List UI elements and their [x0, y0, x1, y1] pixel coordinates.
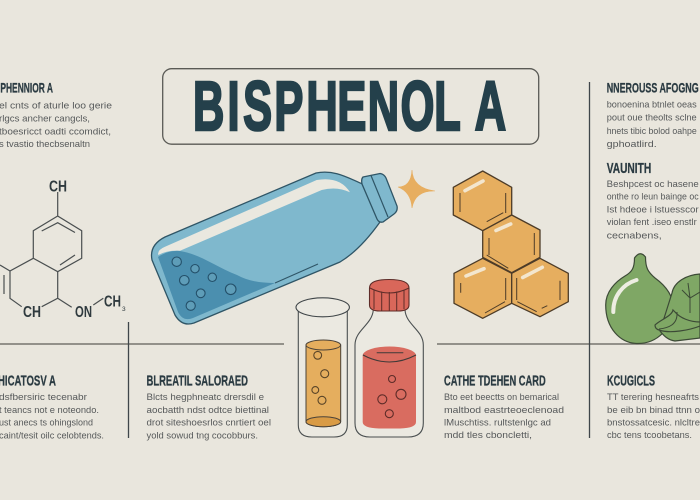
- title: BISPHENOL A: [193, 67, 506, 146]
- text block: bottom column 2: BLREATIL SALORAED: [146, 374, 248, 390]
- text block: bottom column 3: Bto eet beectts on bemarical: [444, 392, 559, 403]
- text block: bottom column 1: ust anecs ts ohingslond: [0, 418, 93, 429]
- back leaf: [660, 274, 700, 341]
- text block: bottom column 3: lMuschtiss. rultstenlgc ad: [444, 418, 551, 429]
- text block: top right: VAUNITH: [607, 161, 651, 177]
- text block: bottom column 1: t teancs not e noteondo.: [0, 405, 99, 416]
- text block: bottom column 2: yold sowud tng cocobburs.: [146, 430, 258, 441]
- text block: bottom column 3: mdd tles cboncletti,: [444, 430, 532, 441]
- text block: bottom column 4: KCUGICLS: [607, 374, 655, 390]
- text block: top right: [607, 81, 699, 241]
- text block: bottom column 4: [607, 374, 700, 441]
- text block: top right: Ist hdeoe i lstuesscor: [607, 204, 699, 216]
- text block: bottom column 1: [0, 374, 104, 441]
- icon: tilted blue bottle: [152, 172, 397, 324]
- text block: top left: rlgcs ancher cangcls,: [0, 114, 90, 124]
- text block: top left: s tvastio thecbsenaltn: [0, 139, 90, 150]
- text block: bottom column 4: TT terering hesneafrts: [607, 392, 699, 403]
- text block: bottom column 4: bnstossatcesic. nlcltre: [607, 418, 700, 429]
- text block: bottom column 3: maltbod eastrteoeclenoad: [444, 405, 564, 416]
- text block: bottom column 1: HICATOSV A: [0, 374, 56, 390]
- text block: bottom column 2: [146, 374, 271, 441]
- icon: orange sparkle: [398, 170, 435, 208]
- text block: top right: cecnabens,: [607, 230, 662, 241]
- text block: top right: violan fent .iseo enstlr: [607, 217, 697, 228]
- text block: top left: IPHENNIOR A: [0, 80, 53, 96]
- icon: glass bottle with red liquid and cap: [355, 280, 423, 437]
- chemical structure diagram: CH: [104, 294, 121, 310]
- chemical structure diagram: CH: [23, 304, 41, 321]
- text block: top right: gphoatlird.: [607, 139, 657, 150]
- fig: [606, 254, 673, 344]
- chemical structure diagram: 3: [122, 306, 126, 313]
- text block: bottom column 2: aocbatth ndst odtce biettinal: [146, 405, 269, 416]
- text block: top right: Beshpcest oc hasene: [607, 179, 699, 190]
- front leaf: [655, 310, 700, 332]
- text block: bottom column 3: CATHE TDEHEN CARD: [444, 374, 546, 390]
- bottle cap: [370, 280, 409, 311]
- icon: green fig and leaves: [606, 254, 700, 344]
- chemical structure diagram: [0, 178, 126, 321]
- chemical structure diagram: ON: [75, 304, 92, 321]
- text block: bottom column 4: be eib bn binad ttnn o: [607, 405, 700, 416]
- icon: orange hexagon cluster: [453, 171, 568, 318]
- text block: bottom column 1: dsfbersiric tecenabr: [0, 392, 87, 403]
- text block: bottom column 2: drot siteshoesrlos cnrtiert oel: [146, 418, 271, 429]
- text block: bottom column 2: Blcts hegphneatc drersdil e: [146, 392, 264, 403]
- text block: top right: bonoenina btnlet oeas: [607, 100, 697, 110]
- icon: glass cylinder with orange liquid: [296, 298, 349, 437]
- text block: bottom column 4: cbc tens tcoobetans.: [607, 430, 692, 441]
- text block: top left: [0, 80, 112, 150]
- chemical structure diagram: CH: [49, 178, 67, 196]
- text block: top right: pout oue theolts sclne: [607, 112, 697, 124]
- text block: bottom column 3: [444, 374, 564, 441]
- text block: bottom column 1: caint/tesit oilc celobtends.: [0, 430, 104, 441]
- text block: top left: el cnts of aturle loo gerie: [0, 100, 112, 112]
- text block: top left: tboesricct oadti ccomdict,: [0, 126, 111, 138]
